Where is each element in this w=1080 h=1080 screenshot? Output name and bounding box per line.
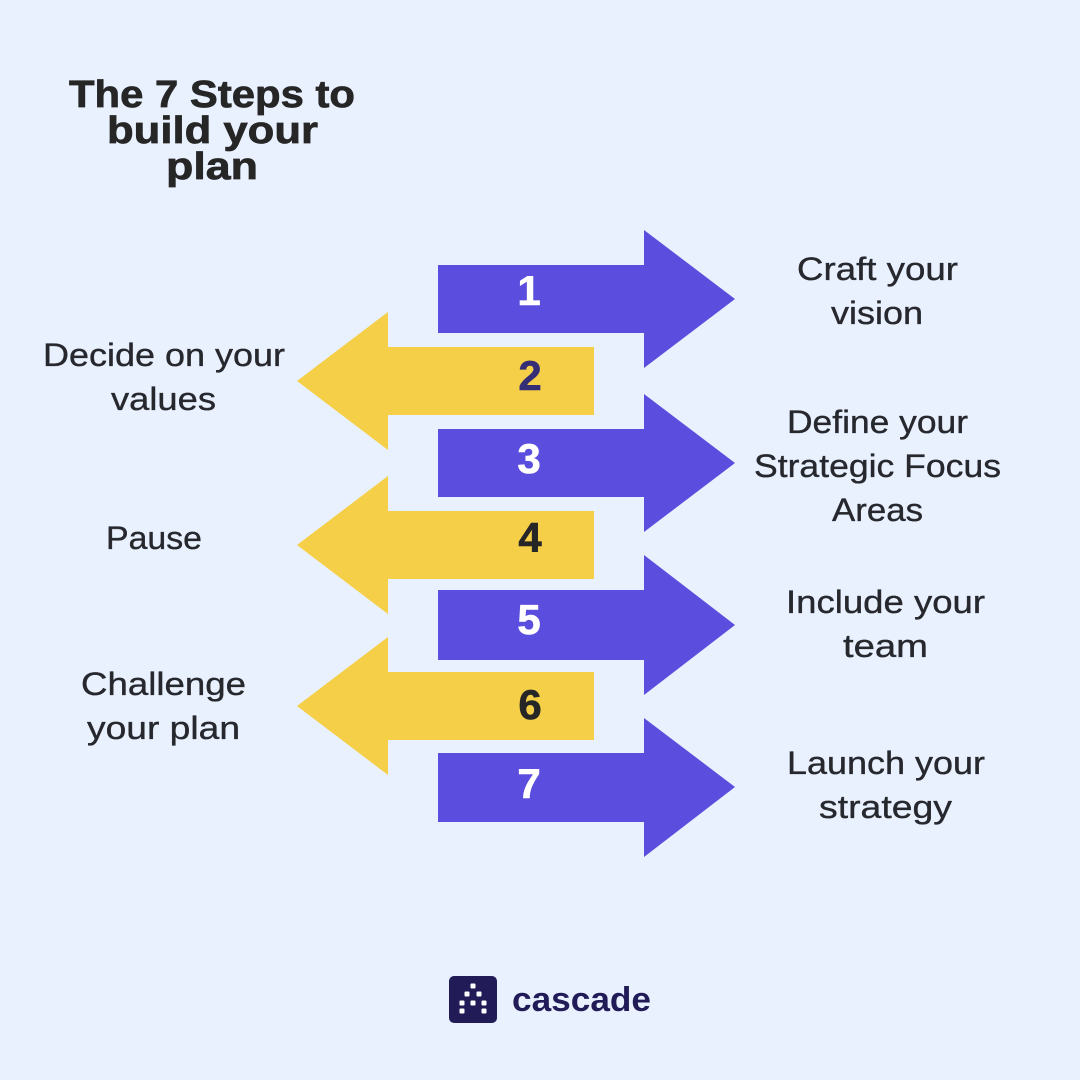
step 4: label: Pause [106, 520, 202, 556]
step 2: label [43, 337, 285, 417]
title: The 7 Steps to [69, 74, 355, 116]
step 6: label: Challenge [81, 666, 246, 702]
step 6: arrow: 6 [518, 681, 542, 728]
step 3: label: Areas [832, 492, 923, 528]
step 3: arrow: 3 [517, 435, 541, 482]
title: plan [166, 146, 258, 188]
step 1: arrow [438, 230, 735, 368]
step 6: label: your plan [87, 710, 240, 746]
step 1: arrow: 1 [517, 267, 541, 314]
step 2: label: values [111, 381, 216, 417]
step 7: label: Launch your [787, 745, 985, 781]
step 5: arrow [438, 555, 735, 695]
title: build your [107, 110, 318, 152]
step 7: arrow: 7 [517, 760, 541, 807]
step 1: label: Craft your [797, 251, 958, 287]
step 6: label [81, 666, 246, 746]
step 2: label: Decide on your [43, 337, 285, 373]
step 3: label: Strategic Focus [754, 448, 1001, 484]
step 6: arrow [297, 637, 594, 775]
title [69, 74, 355, 188]
step 7: arrow [438, 718, 735, 857]
step 5: label: team [843, 628, 928, 664]
step 5: label: Include your [786, 584, 985, 620]
step 5: arrow: 5 [517, 596, 541, 643]
step 4: arrow [297, 476, 594, 614]
step 5: label [786, 584, 985, 664]
step 3: label [754, 404, 1001, 528]
step 7: label [787, 745, 985, 825]
step 3: label: Define your [787, 404, 968, 440]
step 4: arrow: 4 [518, 514, 542, 561]
logo: cascade: cascade [512, 981, 651, 1019]
step 2: arrow: 2 [518, 352, 542, 399]
step 2: arrow [297, 312, 594, 450]
step 1: label: vision [831, 295, 923, 331]
logo: cascade [449, 976, 651, 1023]
step 1: label [797, 251, 958, 331]
step 7: label: strategy [819, 789, 952, 825]
step 3: arrow [438, 394, 735, 532]
